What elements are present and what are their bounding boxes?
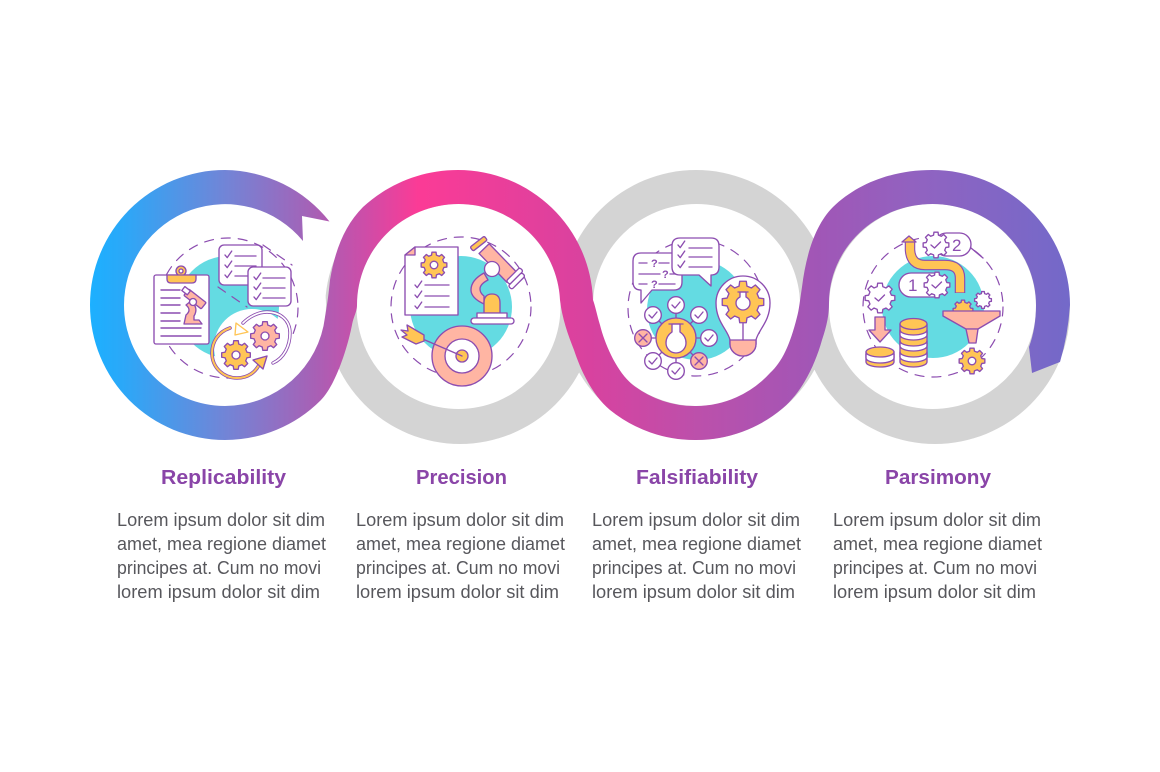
heading: Precision — [416, 467, 507, 489]
body text: principes at. Cum no movi — [833, 558, 1037, 578]
body text: principes at. Cum no movi — [592, 558, 796, 578]
column: parsimony — [833, 467, 1042, 602]
teal circle — [410, 256, 512, 358]
rejected nodes — [635, 330, 707, 369]
flask hub — [656, 318, 696, 358]
column: falsifiability — [592, 467, 801, 602]
clipboard — [154, 266, 209, 344]
body text: lorem ipsum dolor sit dim — [592, 582, 795, 602]
step 1 badge — [899, 272, 950, 298]
light bulb with gear — [716, 276, 770, 356]
target and arrow — [401, 325, 492, 386]
dashed ring — [863, 237, 1003, 377]
gears and funnel — [943, 292, 1000, 374]
body text: amet, mea regione diamet — [117, 534, 326, 554]
body text: principes at. Cum no movi — [117, 558, 321, 578]
dashed ring — [628, 240, 764, 376]
microscope — [470, 236, 525, 324]
teal circle — [647, 260, 747, 360]
tall coin stack — [900, 318, 927, 367]
heading: Replicability — [161, 467, 287, 489]
question bubble: ? — [651, 258, 658, 270]
document with gear — [405, 247, 458, 315]
body text: amet, mea regione diamet — [833, 534, 1042, 554]
dashed connectors — [218, 245, 292, 307]
heading: Parsimony — [885, 467, 992, 489]
check nodes — [645, 297, 717, 379]
icon: precision — [391, 236, 531, 386]
teal circle — [177, 256, 279, 358]
question bubble — [633, 253, 682, 303]
gears with cycle arrows — [212, 312, 290, 378]
down arrow — [869, 317, 891, 342]
body text — [833, 510, 1042, 602]
gradient ribbon with arrowhead — [90, 170, 1070, 440]
checklist bubble — [672, 238, 719, 286]
heading: Falsifiability — [636, 467, 759, 489]
white backing behind gears — [214, 309, 290, 385]
checklist card back — [219, 245, 262, 285]
step 2 badge: 2 — [952, 236, 961, 255]
step 2 badge — [923, 232, 983, 258]
icon: falsifiability — [628, 238, 770, 379]
step 1 badge: 1 — [908, 276, 917, 295]
dashed ring — [158, 238, 298, 378]
single coin stack — [866, 347, 894, 367]
icon: parsimony — [863, 232, 1003, 377]
body text: lorem ipsum dolor sit dim — [117, 582, 320, 602]
big white gear — [865, 283, 895, 313]
question bubble: ? — [651, 279, 658, 291]
white ring interiors — [124, 204, 1036, 409]
body text: Lorem ipsum dolor sit dim — [117, 510, 325, 530]
body text: Lorem ipsum dolor sit dim — [592, 510, 800, 530]
body text: lorem ipsum dolor sit dim — [356, 582, 559, 602]
network links — [643, 305, 709, 371]
teal circle — [882, 256, 984, 358]
body text: amet, mea regione diamet — [356, 534, 565, 554]
body text: principes at. Cum no movi — [356, 558, 560, 578]
question bubble: ? — [662, 269, 669, 281]
column: replicability — [117, 467, 326, 602]
body text — [356, 510, 565, 602]
body text — [117, 510, 326, 602]
grey background rings — [325, 170, 1070, 444]
dashed ring — [391, 237, 531, 377]
icon: replicability — [154, 238, 298, 385]
checklist card front — [248, 267, 291, 306]
body text: Lorem ipsum dolor sit dim — [833, 510, 1041, 530]
body text: lorem ipsum dolor sit dim — [833, 582, 1036, 602]
body text: Lorem ipsum dolor sit dim — [356, 510, 564, 530]
body text: amet, mea regione diamet — [592, 534, 801, 554]
yellow path arrow — [902, 236, 960, 293]
body text — [592, 510, 801, 602]
column: precision — [356, 467, 565, 602]
